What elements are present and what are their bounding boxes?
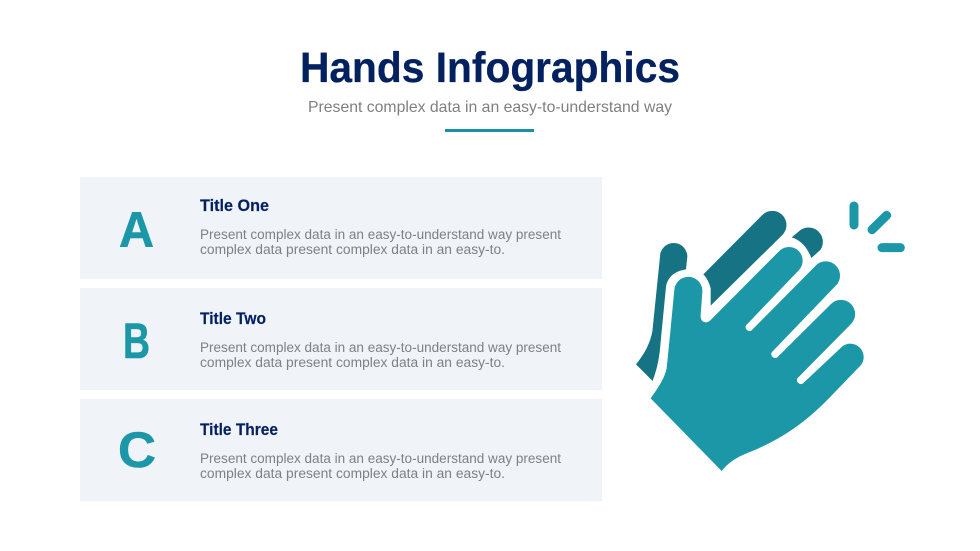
- heading: Title One: Title One: [200, 197, 269, 215]
- back thumb: [636, 243, 687, 381]
- text block: A: complex data present complex data in an easy-to.: [200, 242, 505, 257]
- text block: B: Present complex data in an easy-to-understand way present: [200, 340, 561, 355]
- text block: A: Present complex data in an easy-to-understand way present: [200, 227, 561, 242]
- panel: A: [80, 177, 602, 279]
- text block: A: [200, 227, 561, 257]
- heading: Title Two: Title Two: [200, 310, 266, 328]
- letter A: A: [119, 202, 154, 258]
- panel: C: [80, 399, 602, 501]
- letter C: C: [118, 422, 156, 478]
- text block: B: [200, 340, 561, 370]
- text block: C: [200, 451, 561, 481]
- heading: Title Three: Title Three: [200, 421, 278, 439]
- panel: B: [80, 288, 602, 390]
- back index finger: [703, 211, 786, 306]
- title: Hands Infographics: [300, 44, 680, 92]
- subtitle: Present complex data in an easy-to-understand way: [308, 99, 672, 116]
- front hand: [651, 247, 864, 471]
- title underline: [445, 129, 534, 132]
- letter B: B: [123, 313, 150, 369]
- text block: B: complex data present complex data in an easy-to.: [200, 355, 505, 370]
- text block: C: Present complex data in an easy-to-understand way present: [200, 451, 561, 466]
- icon: clapping hands: [636, 206, 900, 471]
- spark lines: [854, 206, 900, 248]
- back middle finger: [792, 228, 823, 258]
- text block: C: complex data present complex data in an easy-to.: [200, 466, 505, 481]
